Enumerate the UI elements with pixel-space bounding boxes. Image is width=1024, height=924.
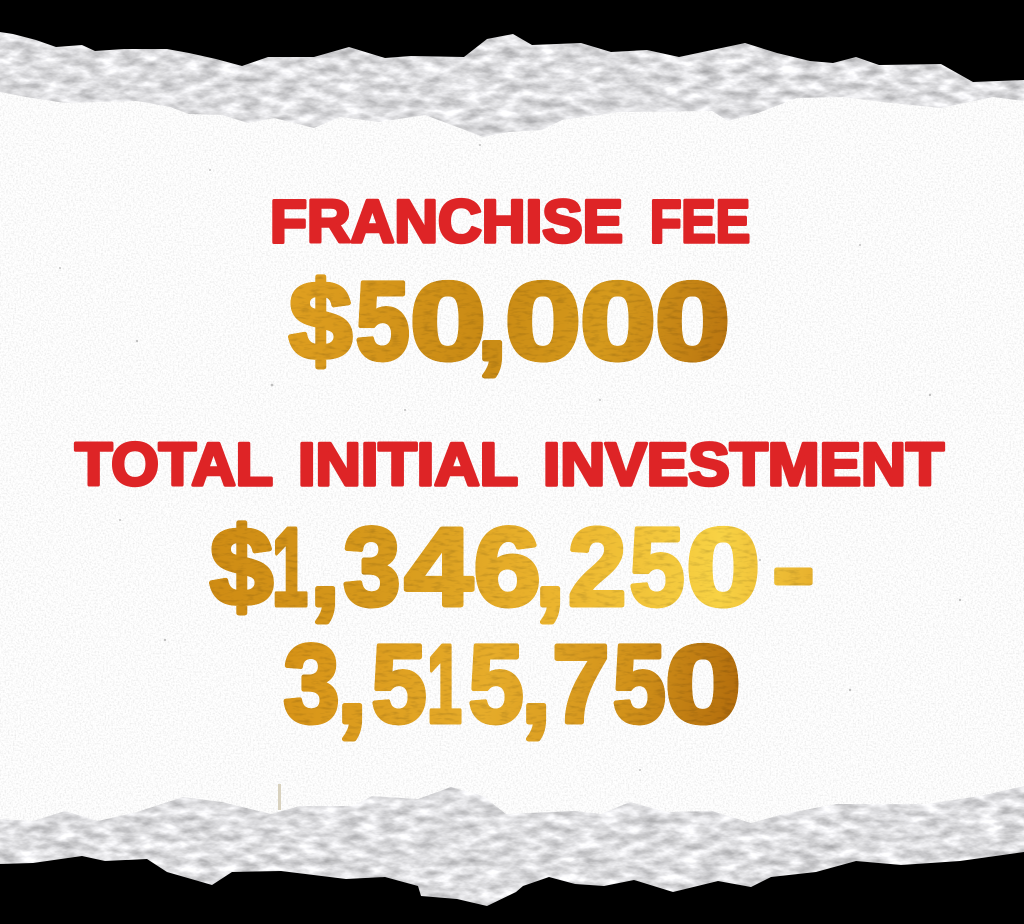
amount: $50,000: 0 bbox=[655, 260, 730, 383]
amount: $1,346,250 -: - bbox=[772, 506, 815, 629]
heading: franchise fee: FRANCHISE bbox=[270, 188, 623, 255]
white paper panel bbox=[0, 92, 1024, 823]
amount: $50,000: , bbox=[477, 260, 507, 383]
amount: $50,000: 5 bbox=[356, 260, 410, 383]
amount: $1,346,250 -: 1 bbox=[272, 506, 308, 629]
heading: franchise fee: FEE bbox=[650, 188, 750, 255]
amount: 3,515,750: 0 bbox=[665, 623, 741, 746]
amount: $50,000: 0 bbox=[580, 260, 656, 383]
amount: $1,346,250 -: 2 bbox=[568, 506, 626, 629]
heading: total initial investment: TOTAL bbox=[75, 431, 273, 498]
amount: $1,346,250 -: 4 bbox=[405, 506, 473, 629]
amount: $50,000 bbox=[289, 260, 730, 383]
amount: $1,346,250 -: $ bbox=[210, 506, 273, 629]
amount: $1,346,250 - bbox=[210, 506, 815, 629]
heading: total initial investment: INITIAL bbox=[298, 431, 518, 498]
amount: $1,346,250 -: , bbox=[535, 506, 565, 629]
amount: 3,515,750: 5 bbox=[468, 623, 524, 746]
amount: 3,515,750: 5 bbox=[372, 623, 426, 746]
amount: $1,346,250 -: 6 bbox=[474, 506, 541, 629]
amount: 3,515,750: 5 bbox=[613, 623, 666, 746]
amount: 3,515,750: 7 bbox=[552, 623, 609, 746]
amount: 3,515,750: 3 bbox=[284, 623, 340, 746]
amount: $50,000: 0 bbox=[505, 260, 581, 383]
amount: $1,346,250 -: , bbox=[310, 506, 340, 629]
amount: 3,515,750: 1 bbox=[427, 623, 462, 746]
amount: 3,515,750 bbox=[284, 623, 741, 746]
amount: 3,515,750: , bbox=[521, 623, 551, 746]
amount: $1,346,250 -: 3 bbox=[343, 506, 400, 629]
amount: $50,000: $ bbox=[289, 260, 352, 383]
amount: $50,000: 0 bbox=[410, 260, 486, 383]
heading: total initial investment: INVESTMENT bbox=[543, 431, 944, 498]
amount: $1,346,250 -: 5 bbox=[630, 506, 684, 629]
amount: $1,346,250 -: 0 bbox=[686, 506, 760, 629]
amount: 3,515,750: , bbox=[337, 623, 367, 746]
heading: total initial investment bbox=[75, 431, 944, 498]
